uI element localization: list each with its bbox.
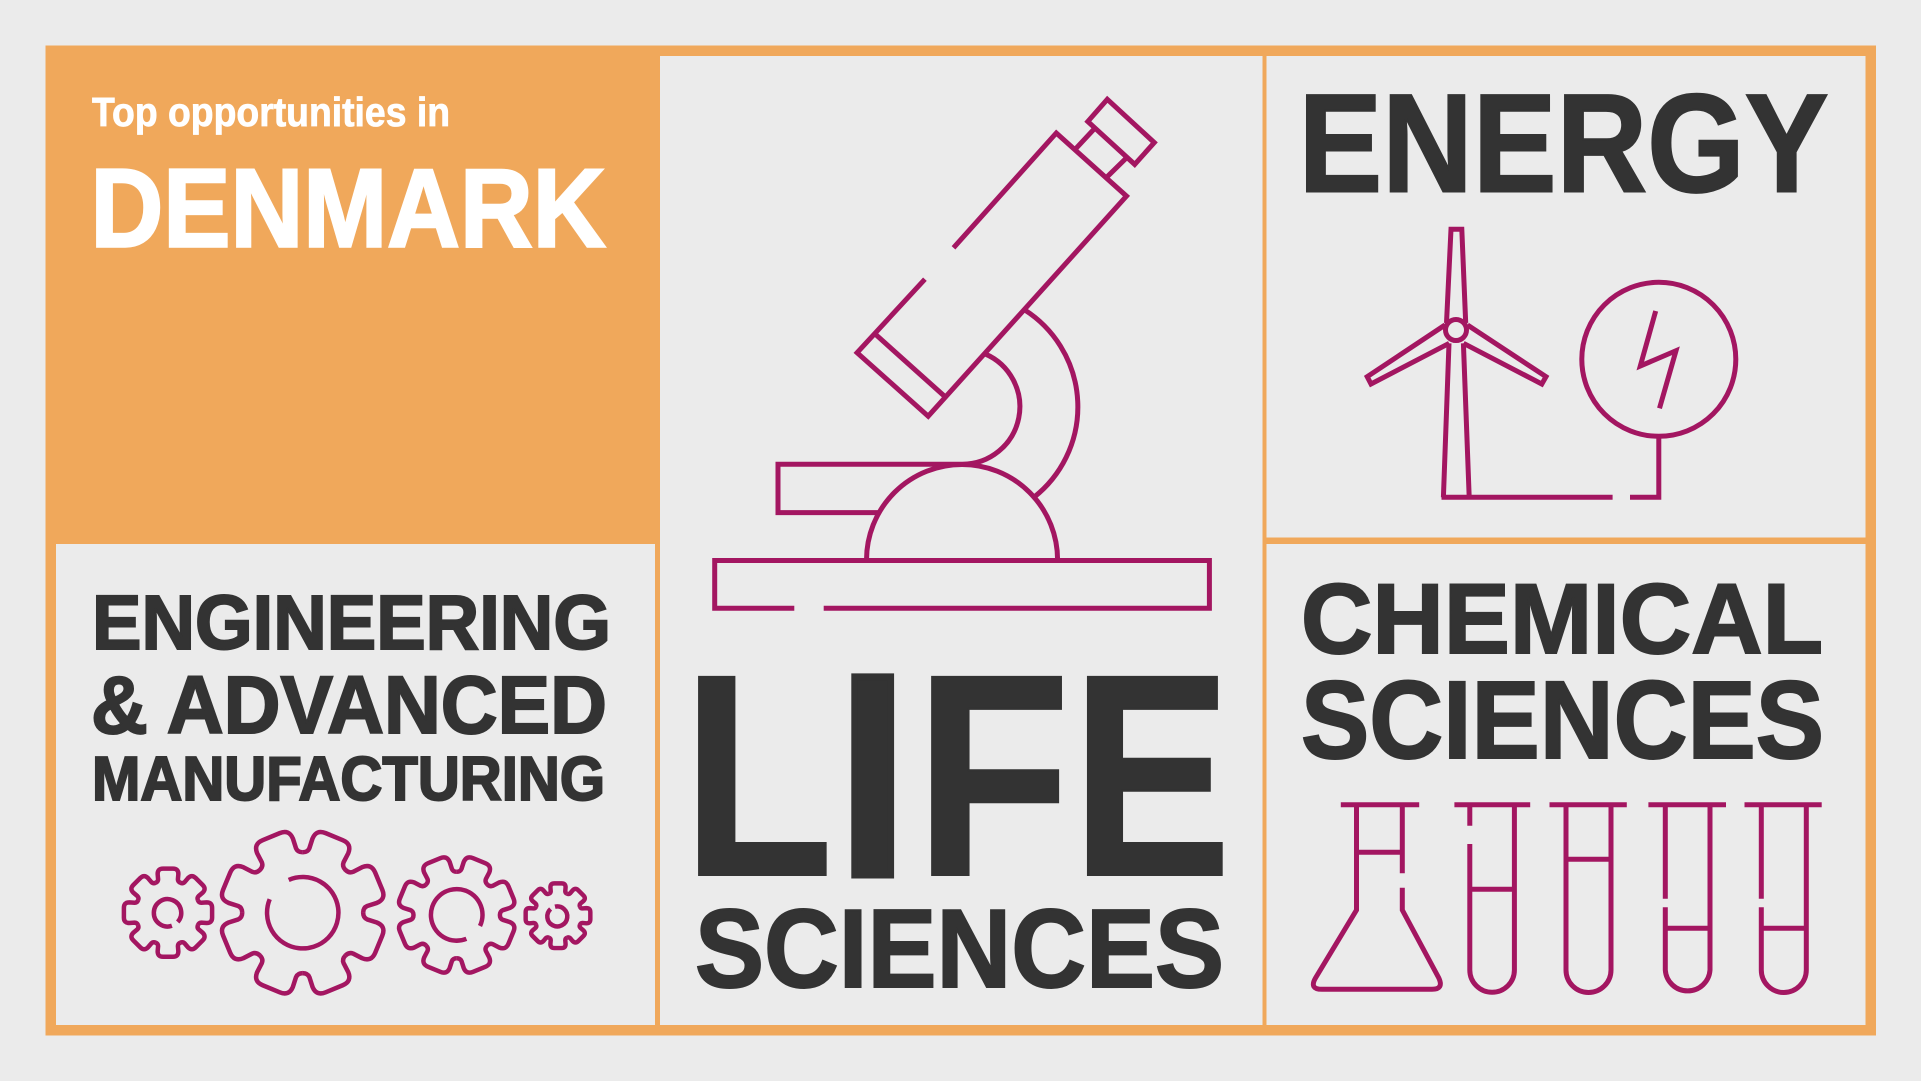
heading: life: L — [682, 615, 833, 937]
icon: wind turbine — [1367, 229, 1546, 497]
icon: power line and bulb — [1442, 282, 1736, 497]
heading: life: I — [837, 615, 908, 937]
heading: manufacturing: MANUFACTURING — [92, 745, 605, 814]
heading: sciences: SCIENCES — [695, 887, 1224, 1011]
panel: chemical sciences — [1266, 544, 1866, 1025]
panel: engineering and advanced manufacturing — [56, 544, 655, 1025]
heading: engineering: ENGINEERING — [92, 580, 611, 666]
icon: test tube 3 — [1648, 805, 1726, 991]
icon: microscope — [715, 99, 1209, 608]
icon: test tube 4 — [1744, 805, 1822, 992]
heading: sciences: SCIENCES — [1301, 659, 1824, 782]
panel: energy — [1266, 56, 1866, 538]
icon: test tube 2 — [1550, 805, 1627, 992]
gear 4 — [526, 883, 590, 948]
heading: life: E — [1072, 615, 1231, 937]
icon: gears — [124, 805, 590, 1020]
gear 1 — [124, 869, 212, 957]
heading: and advanced: & ADVANCED — [91, 660, 607, 751]
gear 2 — [195, 805, 410, 1020]
panel: life sciences — [660, 56, 1262, 1025]
heading: chemical: CHEMICAL — [1301, 563, 1823, 674]
heading: energy: ENERGY — [1298, 64, 1828, 222]
icon: flask — [1313, 805, 1440, 989]
gear 3 — [380, 838, 534, 992]
title: Denmark: DENMARK — [90, 146, 606, 270]
supertitle: Top opportunities in — [92, 89, 450, 135]
icon: test tube 1 — [1454, 805, 1530, 992]
heading: life: F — [915, 615, 1070, 937]
